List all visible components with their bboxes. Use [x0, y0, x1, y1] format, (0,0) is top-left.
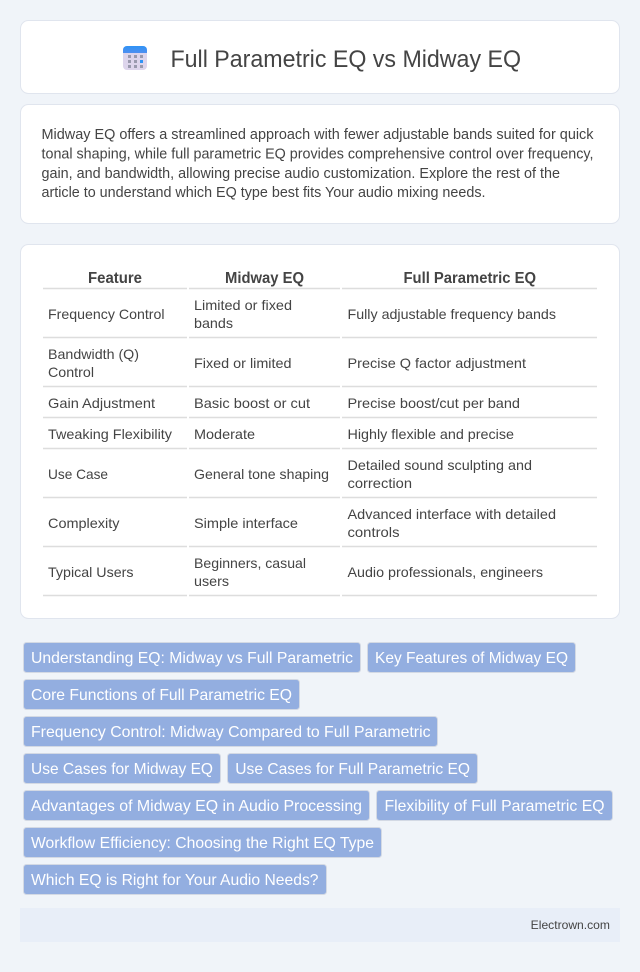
row: typical users: Audio professionals, engineers [348, 564, 543, 580]
tag: which EQ: Which EQ is Right for Your Audio Needs? [31, 872, 319, 889]
row: typical users: Typical Users [48, 564, 134, 580]
row: typical users: users [194, 573, 229, 589]
panel: comparison table [20, 244, 620, 618]
row: gain adjustment: Precise boost/cut per band [348, 395, 520, 411]
tag: understanding EQ [24, 642, 360, 672]
table header row: Full Parametric EQ [404, 270, 536, 287]
row: bandwidth control: Control [48, 364, 94, 380]
row: frequency control: Fully adjustable frequency bands [348, 306, 556, 322]
tag: advantages [24, 790, 370, 820]
row: gain adjustment: Gain Adjustment [48, 395, 155, 411]
row: use case: Detailed sound sculpting and [348, 457, 532, 473]
row: gain adjustment: Basic boost or cut [194, 395, 310, 411]
row: tweaking flexibility: Moderate [194, 426, 255, 442]
row: typical users: Beginners, casual [194, 555, 306, 571]
row: complexity [48, 506, 556, 540]
intro paragraph: gain, and bandwidth, allowing precise audio customization. Explore the rest of the [42, 166, 560, 182]
row: bandwidth control: Precise Q factor adjustment [348, 355, 526, 371]
intro paragraph: Midway EQ offers a streamlined approach with fewer adjustable bands suited for quick [42, 127, 594, 143]
table header row: Midway EQ [225, 270, 304, 287]
tag: workflow efficiency [24, 828, 382, 858]
row: complexity: Complexity [48, 515, 120, 531]
intro paragraph [42, 127, 594, 201]
row: tweaking flexibility [48, 426, 514, 442]
row: use case: General tone shaping [194, 466, 329, 482]
tag: use cases full parametric: Use Cases for Full Parametric EQ [235, 761, 470, 778]
row: bandwidth control: Fixed or limited [194, 355, 292, 371]
row: frequency control: Frequency Control [48, 306, 164, 322]
row: complexity: Advanced interface with detailed [348, 506, 556, 522]
tag: understanding EQ: Understanding EQ: Midway vs Full Parametric [31, 650, 353, 667]
intro paragraph: tonal shaping, while full parametric EQ provides comprehensive control over frequency, [42, 146, 594, 162]
row: bandwidth control [48, 346, 526, 380]
panel: topic tags [24, 642, 612, 894]
tag: flexibility [376, 790, 612, 820]
footer: Electrown.com [531, 918, 610, 932]
tag: use cases full parametric [228, 754, 478, 784]
tag: core functions [24, 680, 300, 710]
tag: frequency control: Frequency Control: Midway Compared to Full Parametric [31, 724, 430, 741]
row: frequency control [48, 297, 556, 331]
row: complexity: controls [348, 524, 400, 540]
row: tweaking flexibility: Highly flexible and precise [348, 426, 514, 442]
icon: calendar grid [123, 46, 147, 70]
footer [20, 908, 620, 942]
table header row [88, 270, 536, 287]
row: complexity: Simple interface [194, 515, 298, 531]
row: tweaking flexibility: Tweaking Flexibility [48, 426, 172, 442]
row: frequency control: Limited or fixed [194, 297, 292, 313]
table header row: Feature [88, 270, 142, 287]
tag: workflow efficiency: Workflow Efficiency: Choosing the Right EQ Type [31, 835, 374, 852]
tag: use cases midway [24, 754, 220, 784]
tag: core functions: Core Functions of Full Parametric EQ [31, 687, 292, 704]
row: frequency control: bands [194, 315, 233, 331]
tag: advantages: Advantages of Midway EQ in Audio Processing [31, 798, 362, 815]
tag: use cases midway: Use Cases for Midway EQ [31, 761, 213, 778]
panel: introduction text [20, 104, 620, 224]
row: gain adjustment [48, 395, 520, 411]
tag: key features: Key Features of Midway EQ [375, 650, 568, 667]
tag: flexibility: Flexibility of Full Parametric EQ [384, 798, 604, 815]
row: use case [48, 457, 532, 491]
panel: title header [20, 20, 620, 94]
row: typical users [48, 555, 543, 589]
intro paragraph: article to understand which EQ type best fits Your audio mixing needs. [42, 185, 486, 201]
title: Full Parametric EQ vs Midway EQ [170, 46, 521, 73]
tag: key features [368, 642, 576, 672]
tag: which EQ [24, 864, 326, 894]
row: bandwidth control: Bandwidth (Q) [48, 346, 139, 362]
tag: frequency control [24, 716, 438, 746]
row: use case: Use Case [48, 466, 108, 482]
row: use case: correction [348, 475, 412, 491]
